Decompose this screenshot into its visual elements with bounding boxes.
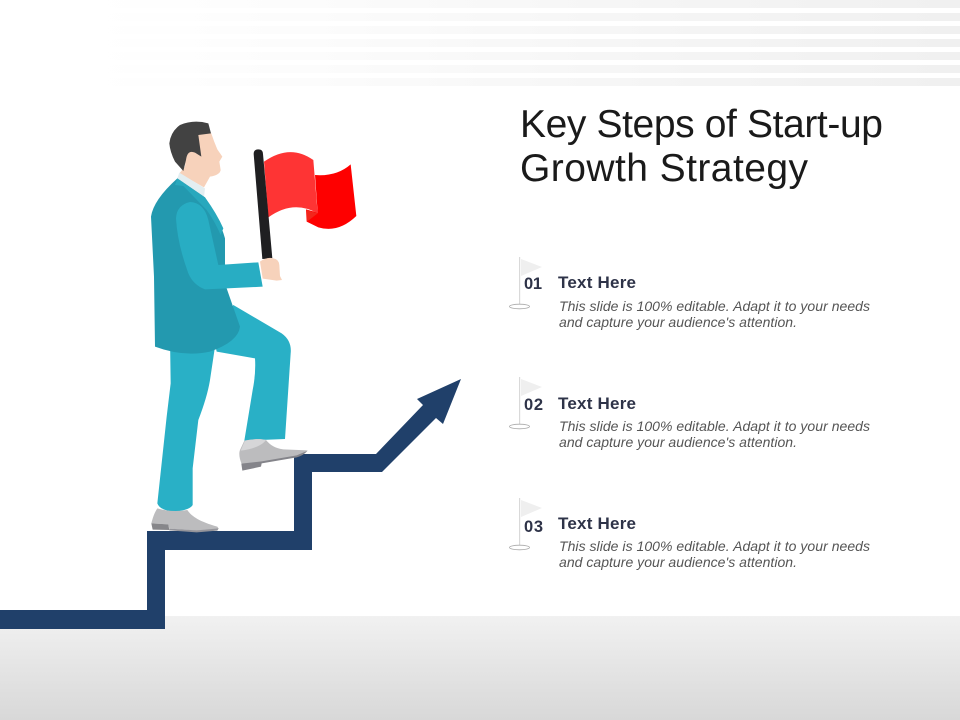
standing leg bbox=[157, 337, 215, 512]
raised shoe bbox=[239, 439, 308, 471]
flag fold shadow bbox=[307, 210, 318, 222]
description 03 bbox=[559, 538, 870, 570]
title bbox=[520, 103, 883, 190]
upper body and flag bbox=[151, 122, 356, 354]
flag front bbox=[264, 152, 318, 217]
flag back fold bbox=[306, 164, 356, 229]
hand bbox=[260, 258, 282, 281]
title: Growth Strategy bbox=[520, 147, 808, 190]
icon: flag 02 bbox=[510, 377, 542, 429]
heading 03: Text Here bbox=[558, 514, 636, 533]
jacket sleeve bbox=[176, 202, 263, 289]
number 02: 02 bbox=[524, 396, 543, 414]
description 01 bbox=[559, 298, 870, 330]
description 02 bbox=[559, 418, 870, 450]
title: Key Steps of Start-up bbox=[520, 103, 883, 146]
heading 01: Text Here bbox=[558, 273, 636, 292]
heading 02: Text Here bbox=[558, 394, 636, 413]
shirt collar bbox=[177, 173, 205, 197]
floor band bbox=[0, 616, 960, 720]
step 03 bbox=[510, 498, 870, 570]
hair bbox=[169, 122, 211, 171]
background stripes bbox=[90, 0, 960, 86]
legs and shoes bbox=[151, 305, 308, 532]
description 03: This slide is 100% editable. Adapt it to your needs bbox=[559, 538, 870, 554]
icon: flag 01 bbox=[510, 257, 542, 309]
jacket bbox=[151, 178, 240, 354]
description 02: and capture your audience's attention. bbox=[559, 434, 797, 450]
description 03: and capture your audience's attention. bbox=[559, 554, 797, 570]
icon: flag 03 bbox=[510, 498, 542, 550]
step 01 bbox=[510, 257, 870, 330]
person bbox=[151, 122, 356, 532]
description 01: This slide is 100% editable. Adapt it to your needs bbox=[559, 298, 870, 314]
flag pole bbox=[254, 149, 272, 259]
step 02 bbox=[510, 377, 870, 450]
stair arrow bbox=[0, 379, 461, 629]
description 01: and capture your audience's attention. bbox=[559, 314, 797, 330]
planted shoe bbox=[151, 508, 219, 532]
description 02: This slide is 100% editable. Adapt it to your needs bbox=[559, 418, 870, 434]
lapel bbox=[175, 178, 223, 235]
number 03: 03 bbox=[524, 518, 543, 536]
number 01: 01 bbox=[524, 275, 542, 293]
bent leg bbox=[213, 305, 291, 441]
head bbox=[179, 133, 222, 187]
